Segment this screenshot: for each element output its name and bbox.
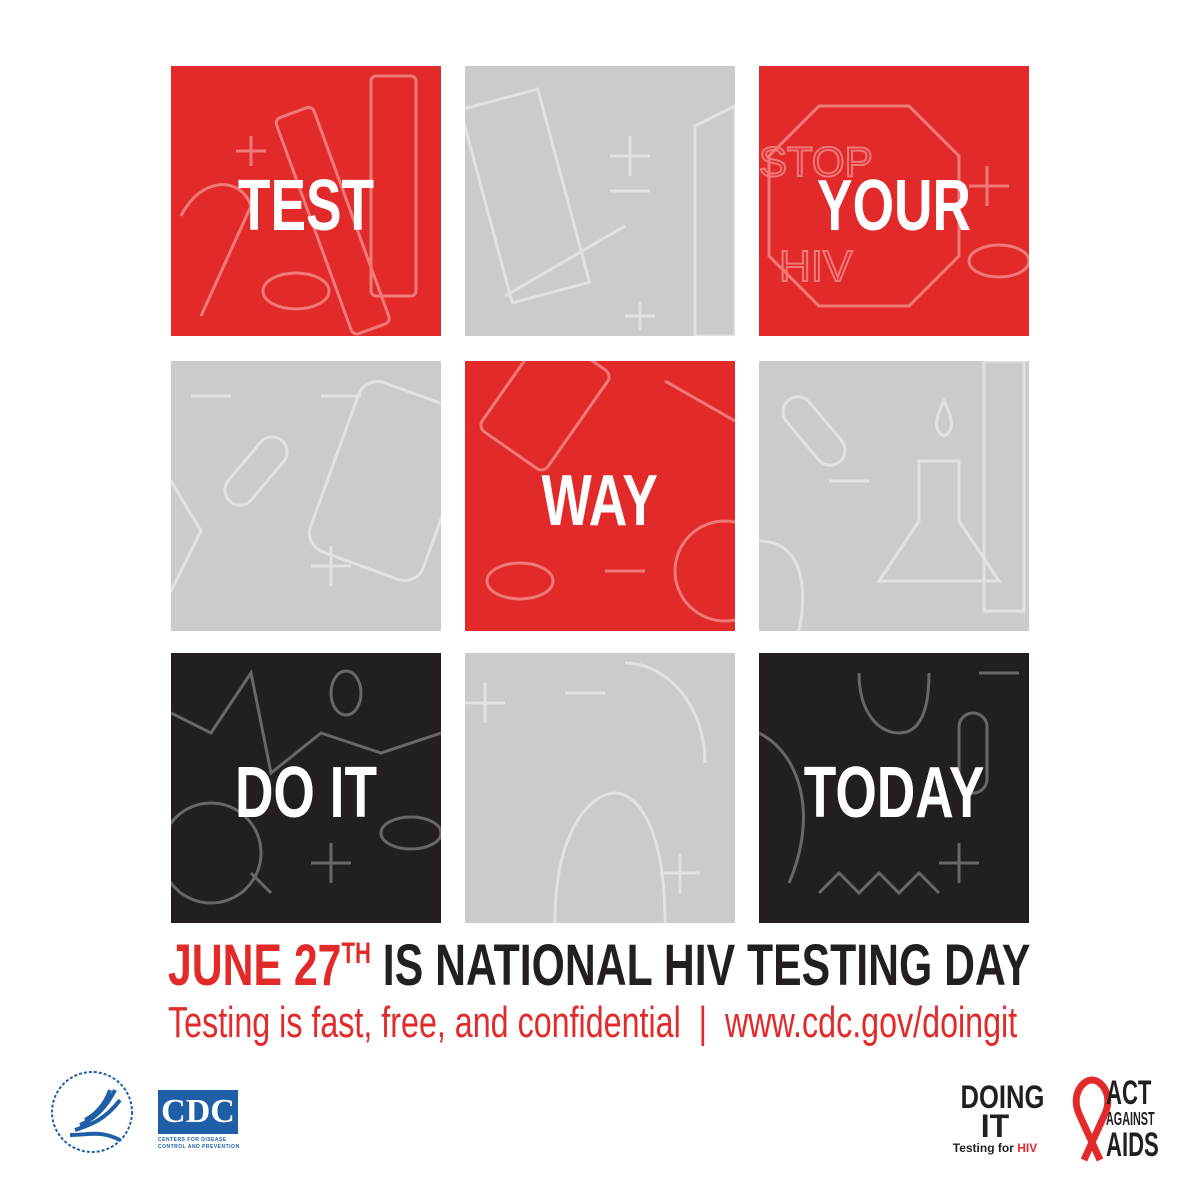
word: DO IT: DO IT	[235, 753, 377, 833]
tile: gray 3	[759, 361, 1029, 631]
word: WAY: WAY	[542, 461, 658, 541]
word: TODAY: TODAY	[804, 753, 984, 833]
logo: CDC: CDC	[161, 1093, 235, 1130]
tile: gray 4	[465, 653, 735, 923]
logo: Doing It: IT	[981, 1108, 1009, 1144]
logo: CDC: CENTERS FOR DISEASE	[158, 1137, 227, 1143]
word: YOUR: YOUR	[817, 166, 971, 246]
logo: Act Against AIDS: ACT	[1106, 1074, 1151, 1112]
tile: gray 1	[465, 66, 735, 336]
logo: Doing It: DOING	[960, 1079, 1044, 1115]
tile: WAY	[465, 361, 735, 631]
tile: TODAY	[759, 653, 1029, 923]
logo: Act Against AIDS	[1072, 1074, 1159, 1164]
tile: YOUR	[759, 66, 1029, 336]
tile: gray 2	[171, 361, 441, 631]
subtitle: Testing is fast, free, and confidential | www.cdc.gov/doingit	[168, 998, 1017, 1047]
tile: TEST	[171, 66, 441, 336]
tile: YOUR: STOP	[759, 138, 873, 185]
logo: HHS	[51, 1071, 133, 1153]
tile: DO IT	[171, 653, 441, 923]
logo: Act Against AIDS: AGAINST	[1106, 1109, 1155, 1129]
logo: CDC	[158, 1090, 240, 1150]
headline: JUNE 27TH IS NATIONAL HIV TESTING DAY	[168, 933, 1030, 998]
logo: Act Against AIDS: AIDS	[1106, 1126, 1159, 1164]
logo: CDC: CONTROL AND PREVENTION	[158, 1144, 240, 1150]
word: TEST: TEST	[238, 166, 374, 246]
tile: YOUR: HIV	[779, 242, 853, 291]
logo: Doing It	[952, 1079, 1044, 1155]
logo: Doing It: Testing for HIV	[953, 1141, 1037, 1155]
